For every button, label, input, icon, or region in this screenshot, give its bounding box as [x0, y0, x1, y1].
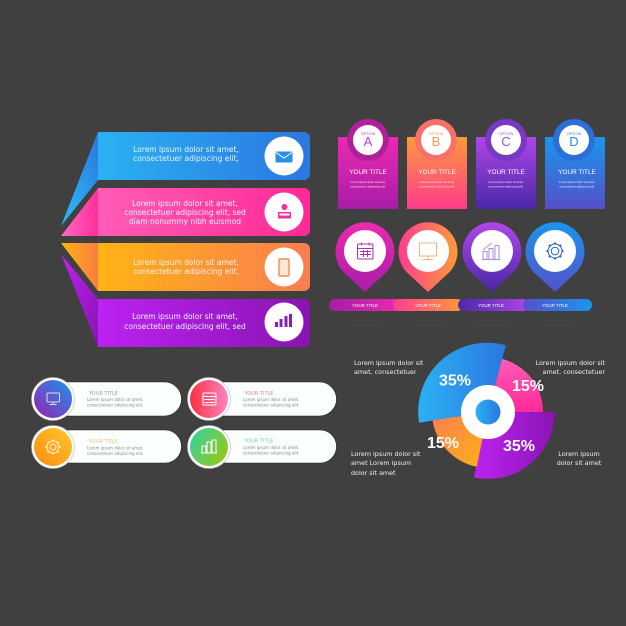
- card D: consectetuer adipiscing elit.: [559, 184, 595, 188]
- banner 1: blue: [61, 132, 310, 226]
- blue centre: [476, 400, 500, 424]
- faint captions: Lorem ipsum dolor sit amet,: [410, 319, 446, 323]
- panel: option cards: [338, 119, 605, 209]
- card B: B: [432, 134, 440, 149]
- banner 2: pink: [61, 188, 310, 236]
- pill 1: purple monitor: YOUR TITLE: [88, 391, 118, 397]
- card C: YOUR TITLE: [487, 169, 525, 176]
- panel: location pins: [336, 222, 584, 292]
- card D: [545, 119, 605, 209]
- banner 2: pink: diam nonummy nibh euismod: [129, 217, 241, 226]
- card B: OPTION: [429, 132, 444, 136]
- faint captions: consectetuer adipiscing elit.: [347, 323, 383, 327]
- pill 1: purple monitor: Lorem ipsum dolor sit amet,: [87, 397, 143, 402]
- percent labels: 35%: [439, 372, 471, 390]
- pin D: gear: [526, 222, 584, 292]
- pill 4: green chart: consectetuer adipiscing elit.: [243, 450, 299, 456]
- label: bottom right: dolor sit amet: [557, 459, 602, 467]
- faint captions: Lorem ipsum dolor sit amet,: [473, 319, 509, 323]
- panel: arrow banners: [61, 132, 310, 347]
- banner 3: orange: consectetuer adipiscing elit,: [133, 267, 239, 276]
- banner 2: pink: consectetuer adipiscing elit, sed: [124, 208, 246, 217]
- panel: timeline bar: [329, 299, 592, 327]
- percent labels: 15%: [427, 435, 459, 452]
- panel: pie chart: [351, 343, 605, 479]
- card D: D: [569, 134, 579, 149]
- card C: C: [501, 134, 511, 149]
- segment B: YOUR TITLE: [415, 303, 441, 308]
- banner 1: blue: consectetuer adipiscing elit,: [133, 154, 239, 163]
- card B: [407, 119, 467, 209]
- card B: YOUR TITLE: [418, 169, 456, 176]
- card A: [338, 119, 398, 209]
- banner 4: purple: consectetuer adipiscing elit, sed: [124, 322, 246, 331]
- label: bottom left: Lorem ipsum dolor sit: [351, 450, 421, 458]
- pin A: calendar: [336, 222, 394, 292]
- pill 4: green chart: Lorem ipsum dolor sit amet,: [243, 445, 299, 450]
- card A: YOUR TITLE: [349, 169, 387, 176]
- segment A: [329, 299, 401, 311]
- banner 4: purple: [61, 254, 310, 347]
- card A: OPTION: [361, 132, 376, 136]
- pill 3: orange gear: consectetuer adipiscing elit.: [87, 451, 143, 456]
- pin C: growth chart: [462, 222, 522, 292]
- pill 4: green chart: YOUR TITLE: [244, 438, 273, 444]
- percent labels: 35%: [503, 438, 535, 455]
- segment C: YOUR TITLE: [478, 303, 504, 308]
- panel: white pill list: [32, 378, 336, 468]
- label: bottom left: [351, 450, 421, 477]
- segment D: YOUR TITLE: [542, 303, 568, 308]
- wedge: orange 15%: [433, 412, 488, 467]
- banner 1: blue: Lorem ipsum dolor sit amet,: [133, 145, 239, 154]
- pill 2: red calendar: YOUR TITLE: [244, 391, 273, 397]
- faint captions: consectetuer adipiscing elit.: [410, 323, 446, 327]
- card C: consectetuer adipiscing elit.: [488, 184, 524, 188]
- card C: Lorem ipsum dolor sit amet,: [488, 180, 524, 184]
- card A: Lorem ipsum dolor sit amet,: [350, 180, 386, 184]
- card A: consectetuer adipiscing elit.: [350, 184, 386, 188]
- card D: YOUR TITLE: [558, 169, 596, 176]
- label: top right: Lorem ipsum dolor sit: [536, 359, 605, 367]
- label: top left: [354, 359, 424, 376]
- faint captions: Lorem ipsum dolor sit amet,: [539, 319, 575, 323]
- pill 1: purple monitor: consectetuer adipiscing elit.: [87, 402, 143, 408]
- percent labels: 15%: [512, 378, 544, 395]
- card C: [476, 119, 536, 209]
- label: top left: amet, consectetuer: [354, 368, 417, 376]
- card B: Lorem ipsum dolor sit amet,: [419, 180, 455, 184]
- pill 3: orange gear: YOUR TITLE: [88, 439, 118, 445]
- segment A: YOUR TITLE: [352, 303, 378, 308]
- pill 2: red calendar: consectetuer adipiscing elit.: [243, 402, 299, 408]
- wedge: blue 35%: [418, 343, 506, 423]
- banner 2: pink: Lorem ipsum dolor sit amet,: [132, 199, 238, 208]
- faint captions: consectetuer adipiscing elit.: [539, 323, 575, 327]
- card D: Lorem ipsum dolor sit amet,: [559, 180, 595, 184]
- segment B: [393, 299, 463, 311]
- white ring: [461, 385, 515, 439]
- card B: consectetuer adipiscing elit.: [419, 184, 455, 188]
- wedge: pink 15%: [488, 359, 543, 412]
- label: top right: amet, consectetuer: [543, 368, 605, 376]
- pill 3: orange gear: Lorem ipsum dolor sit amet,: [87, 446, 143, 450]
- banner 3: orange: [61, 243, 310, 291]
- wedge: purple 35%: [474, 412, 555, 479]
- banner 4: purple: Lorem ipsum dolor sit amet,: [132, 312, 238, 321]
- card D: OPTION: [567, 132, 582, 136]
- label: bottom left: dolor sit amet: [351, 469, 396, 477]
- card A: A: [364, 134, 373, 149]
- label: top left: Lorem ipsum dolor sit: [354, 359, 424, 367]
- pill 2: red calendar: [188, 378, 336, 420]
- segment D: [523, 299, 592, 311]
- segment C: [458, 299, 529, 311]
- label: top right: [536, 359, 605, 376]
- pill 1: purple monitor: [32, 378, 182, 420]
- faint captions: Lorem ipsum dolor sit amet,: [347, 319, 383, 323]
- pill 2: red calendar: Lorem ipsum dolor sit amet,: [243, 397, 299, 402]
- faint captions: [347, 319, 575, 327]
- label: bottom right: Lorem ipsum: [558, 450, 600, 458]
- label: bottom left: amet Lorem ipsum: [351, 459, 411, 467]
- banner 3: orange: Lorem ipsum dolor sit amet,: [133, 258, 239, 267]
- faint captions: consectetuer adipiscing elit.: [473, 323, 509, 327]
- card C: OPTION: [499, 132, 514, 136]
- pill 3: orange gear: [32, 426, 182, 468]
- label: bottom right: [557, 450, 602, 467]
- percent labels: [427, 372, 544, 455]
- pin B: monitor: [398, 222, 457, 292]
- pill 4: green chart: [188, 426, 336, 468]
